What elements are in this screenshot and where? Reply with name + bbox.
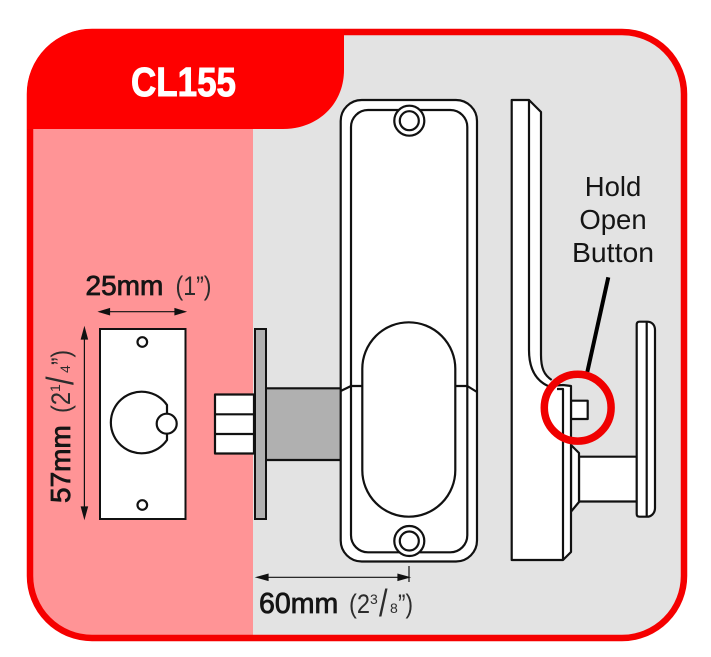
label: 25mm: 25mm xyxy=(86,270,163,301)
label: 57mm: 57mm xyxy=(45,425,76,503)
hold open button xyxy=(571,401,588,419)
header tab xyxy=(27,29,344,129)
title: CL155 xyxy=(131,59,236,105)
collar xyxy=(571,445,579,512)
label: 60mm: / xyxy=(379,583,388,625)
label: 57mm: (2 xyxy=(46,392,76,413)
door cut-out plate xyxy=(100,329,186,519)
label: 60mm: 8 xyxy=(390,600,398,616)
outer case xyxy=(341,100,477,562)
label: 57mm: 1 xyxy=(47,384,63,392)
screw hole top xyxy=(138,337,147,347)
pointer xyxy=(587,277,608,372)
label: 57mm: 4 xyxy=(57,365,73,373)
red ring xyxy=(544,374,611,441)
spindle housing xyxy=(266,388,341,460)
screw hole bottom xyxy=(138,500,147,510)
knob xyxy=(637,322,655,517)
label xyxy=(572,171,654,268)
bottom screw xyxy=(394,526,424,556)
dimension: plate width xyxy=(86,270,212,315)
panel: pink door-side zone xyxy=(30,129,253,638)
knob stem xyxy=(579,457,637,502)
flange xyxy=(255,329,266,519)
dimension: backset xyxy=(257,566,413,625)
label: 60mm: 3 xyxy=(370,591,378,607)
spindle hole xyxy=(111,392,167,453)
front view of lock xyxy=(341,100,477,562)
dimension: plate height xyxy=(40,328,87,518)
label: 60mm: 60mm xyxy=(259,588,338,620)
plate outline xyxy=(100,329,186,519)
arrow: backset xyxy=(257,566,409,582)
small hole xyxy=(157,414,177,434)
label: 25mm: (1”) xyxy=(176,271,212,301)
label: Button xyxy=(572,237,654,268)
arrow: width xyxy=(100,309,185,315)
label: 60mm: ”) xyxy=(398,589,413,619)
label: 57mm: ”) xyxy=(46,350,76,365)
latch bolt xyxy=(215,394,254,454)
seam lines xyxy=(341,386,477,392)
label: 57mm: / xyxy=(40,376,82,385)
label: 60mm xyxy=(259,583,413,625)
top screw xyxy=(394,106,424,136)
oval cover xyxy=(362,322,455,517)
label: Hold xyxy=(585,171,641,202)
label: 57mm xyxy=(40,350,82,503)
label: 60mm: (2 xyxy=(349,589,370,619)
body xyxy=(512,100,571,560)
side view of lock xyxy=(512,100,655,560)
inner case xyxy=(351,110,467,552)
label: Open xyxy=(579,204,647,235)
callout: hold open button xyxy=(544,171,654,441)
arrow: height xyxy=(81,328,87,518)
label: 25mm xyxy=(86,270,212,301)
